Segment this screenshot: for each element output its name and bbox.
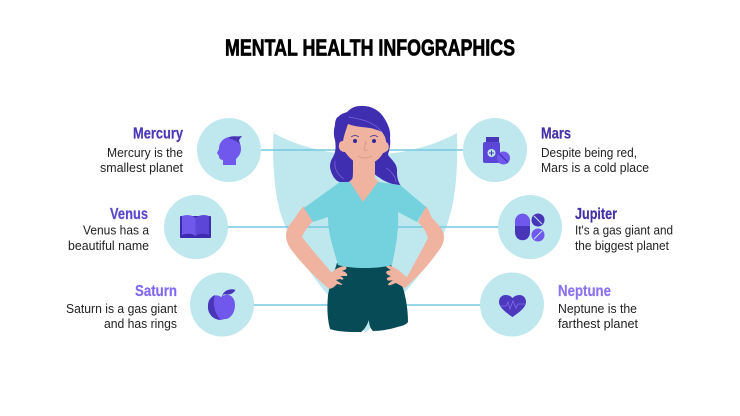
node: Mars (463, 118, 649, 182)
heading: Saturn (135, 283, 177, 300)
description: beautiful name (68, 239, 149, 253)
icon: apple (208, 290, 235, 320)
description (68, 224, 149, 253)
heading: Mars (541, 126, 571, 142)
description: Mars is a cold place (541, 161, 649, 175)
shorts (327, 263, 408, 332)
background shield (273, 133, 457, 332)
description (558, 302, 639, 331)
icon: medicine bottle (483, 137, 510, 164)
description (541, 146, 649, 175)
description: farthest planet (558, 317, 639, 331)
heading: Neptune (558, 283, 611, 300)
node: Neptune (480, 272, 639, 336)
circle (463, 118, 527, 182)
circle (164, 195, 228, 259)
circle (190, 272, 254, 336)
description: Neptune is the (558, 302, 637, 316)
description: It's a gas giant and (575, 224, 673, 238)
node: Venus (68, 195, 228, 259)
node: Saturn (66, 272, 254, 336)
description: and has rings (104, 317, 177, 331)
description: the biggest planet (575, 239, 669, 253)
woman figure (286, 106, 444, 332)
heading: Mercury (133, 126, 183, 142)
description: Despite being red, (541, 146, 637, 160)
heading: Venus (110, 206, 148, 223)
description: Venus has a (83, 224, 149, 238)
shirt (304, 182, 426, 268)
circle (197, 118, 261, 182)
connector lines (222, 150, 505, 305)
node: Jupiter (498, 195, 673, 259)
description (100, 146, 184, 175)
icon: heart (499, 295, 526, 317)
face (339, 124, 389, 165)
circle (480, 272, 544, 336)
icon: head (217, 136, 242, 165)
heading: Jupiter (575, 206, 617, 223)
circle (498, 195, 562, 259)
node: Mercury (100, 118, 261, 182)
description: Saturn is a gas giant (66, 302, 178, 316)
hands (327, 266, 347, 289)
icon: pills (515, 214, 544, 242)
description: smallest planet (100, 161, 184, 175)
description: Mercury is the (107, 146, 183, 160)
title: MENTAL HEALTH INFOGRAPHICS (225, 34, 515, 60)
eyes and smile (351, 136, 378, 158)
hair highlights (335, 117, 396, 182)
right arm (395, 206, 444, 288)
hair back (330, 106, 401, 186)
left arm (286, 206, 337, 288)
icon: open book (180, 215, 211, 238)
description (66, 302, 178, 331)
neck (348, 155, 380, 204)
description (575, 224, 673, 253)
